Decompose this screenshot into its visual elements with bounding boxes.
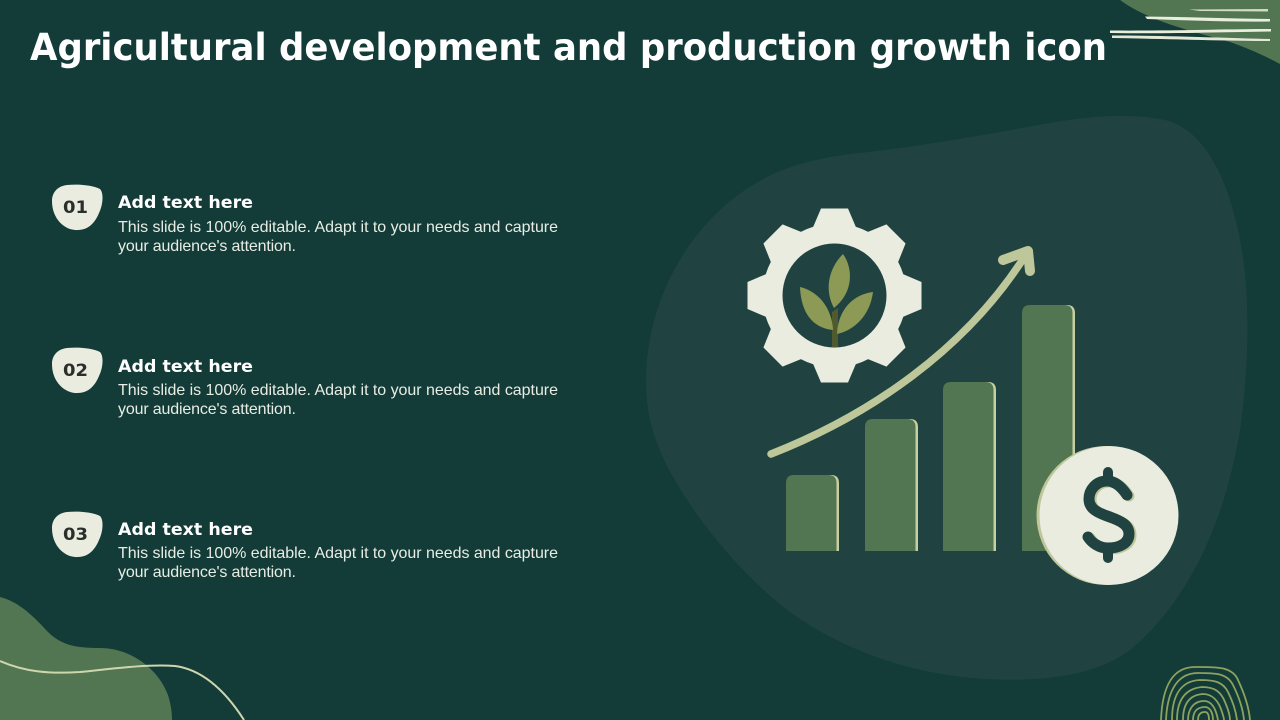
heading 2: Add text here — [118, 357, 253, 377]
badge 03 — [52, 512, 103, 557]
item 3 — [52, 512, 558, 581]
item 1 — [52, 185, 558, 255]
body text 3: This slide is 100% editable. Adapt it to your needs and capture — [118, 545, 558, 562]
growth arrow — [771, 251, 1030, 454]
badge 03: 03 — [63, 525, 88, 545]
plant stem — [832, 308, 838, 347]
title: Agricultural development and production growth icon — [30, 26, 1107, 69]
icon: gear with plant — [748, 208, 922, 382]
heading 3: Add text here — [118, 520, 253, 540]
body text 1: your audience's attention. — [118, 238, 296, 255]
badge 01 — [52, 185, 103, 230]
corner decoration: top right leaf with brush strokes — [1110, 0, 1280, 64]
badge 02: 02 — [63, 361, 88, 381]
body text 2 — [118, 382, 558, 418]
plant leaves — [800, 254, 873, 334]
decoration: bottom left blob with curve — [0, 597, 244, 720]
badge 02 — [52, 348, 103, 393]
body text 3: your audience's attention. — [118, 564, 296, 581]
badge 01: 01 — [63, 198, 88, 218]
bar chart — [786, 305, 1075, 551]
body text 1 — [118, 219, 558, 255]
body text 2: This slide is 100% editable. Adapt it to your needs and capture — [118, 382, 558, 399]
body text 3 — [118, 545, 558, 581]
body text 2: your audience's attention. — [118, 401, 296, 418]
body text 1: This slide is 100% editable. Adapt it to your needs and capture — [118, 219, 558, 236]
background blob panel — [646, 116, 1247, 680]
icon: dollar coin — [1036, 446, 1178, 585]
heading 1: Add text here — [118, 193, 253, 213]
dollar sign — [1088, 472, 1131, 558]
decoration: bottom right concentric rings — [1161, 667, 1250, 720]
item 2 — [52, 348, 558, 418]
